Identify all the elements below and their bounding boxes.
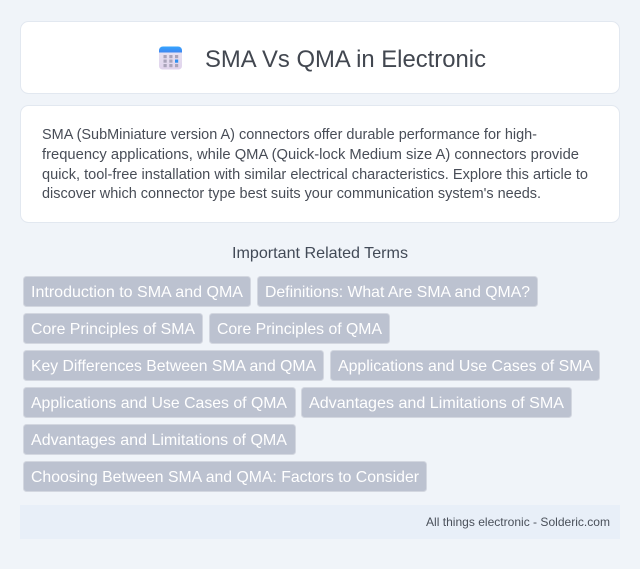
intro text: discover which connector type best suits your communication system's needs. <box>42 186 541 202</box>
intro text: SMA (SubMiniature version A) connectors offer durable performance for high- <box>42 127 537 143</box>
tag: Choosing Between SMA and QMA: Factors to Consider <box>31 469 420 486</box>
intro text: frequency applications, while QMA (Quick-lock Medium size A) connectors provide <box>42 147 579 163</box>
title: SMA Vs QMA in Electronic <box>205 46 486 73</box>
tag: Applications and Use Cases of QMA <box>31 395 287 412</box>
tag <box>24 462 426 492</box>
heading: important related terms: Important Related Terms <box>232 245 408 262</box>
tag: Definitions: What Are SMA and QMA? <box>265 284 530 301</box>
intro panel <box>20 106 620 222</box>
tag <box>258 276 538 306</box>
intro text: quick, tool-free installation with similar electrical characteristics. Explore this article to <box>42 167 588 183</box>
tag <box>24 424 296 454</box>
tag: Advantages and Limitations of SMA <box>309 395 564 412</box>
tag: Advantages and Limitations of QMA <box>31 432 287 449</box>
intro text <box>42 127 588 202</box>
footer <box>20 505 620 539</box>
tag <box>24 276 250 306</box>
tag <box>24 388 296 418</box>
tag <box>24 350 324 380</box>
icon: calendar <box>159 46 182 70</box>
tag <box>24 314 202 344</box>
footer credit: All things electronic - Solderic.com <box>426 515 610 529</box>
tag: Core Principles of QMA <box>217 321 382 338</box>
tag: Introduction to SMA and QMA <box>31 284 243 301</box>
tag: Core Principles of SMA <box>31 321 195 338</box>
header card <box>20 22 620 94</box>
tag list <box>24 276 600 492</box>
tag <box>210 314 390 344</box>
tag <box>330 350 600 380</box>
tag: Key Differences Between SMA and QMA <box>31 358 316 375</box>
tag <box>302 388 572 418</box>
tag: Applications and Use Cases of SMA <box>338 358 593 375</box>
